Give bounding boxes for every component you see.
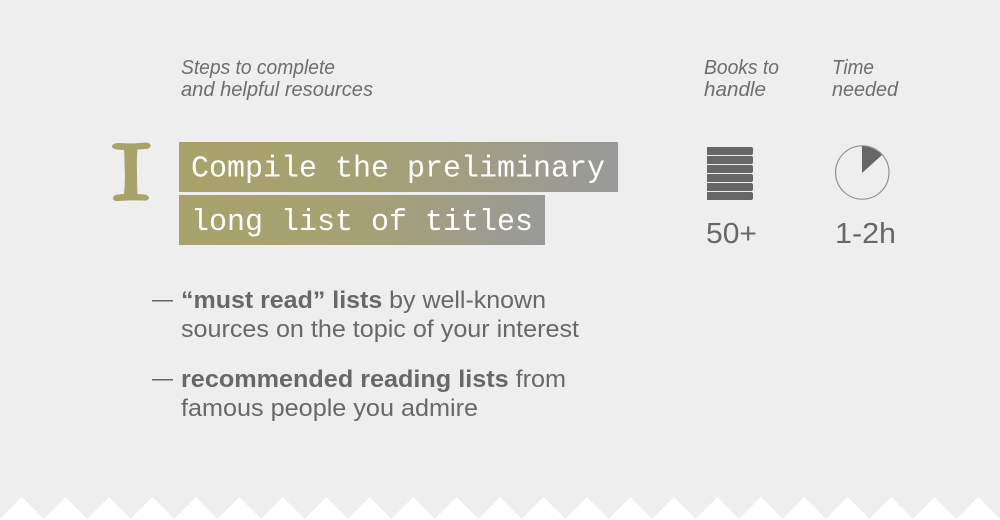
title line 1 [179,142,618,192]
column heading: books [704,57,779,101]
column heading: books: Books to [704,57,779,79]
bullet 1: sources on the topic of your interest [181,316,579,343]
column heading: steps: and helpful resources [181,79,373,101]
title highlight [179,142,618,245]
bullet 2 [152,366,566,422]
icon: clock pie [836,146,889,199]
column heading: books: handle [704,79,766,101]
column heading: time [832,57,899,101]
books value: 50+ [706,218,757,250]
bullet 2: famous people you admire [181,395,478,422]
bullet 2: recommended reading lists from [181,366,566,393]
title line 1: Compile the preliminary [191,152,605,186]
column heading: steps [181,57,373,101]
column heading: time: needed [832,79,899,101]
numeral I [112,142,151,201]
time value: 1-2h [835,218,896,250]
zigzag border [0,497,1000,520]
column heading: time: Time [832,57,874,79]
icon: book stack [707,147,753,200]
title line 2 [179,195,545,245]
bullet 1: “must read” lists by well-known [181,287,546,314]
bullet 1 [152,287,579,343]
column heading: steps: Steps to complete [181,57,335,79]
title line 2: long list of titles [191,205,533,240]
